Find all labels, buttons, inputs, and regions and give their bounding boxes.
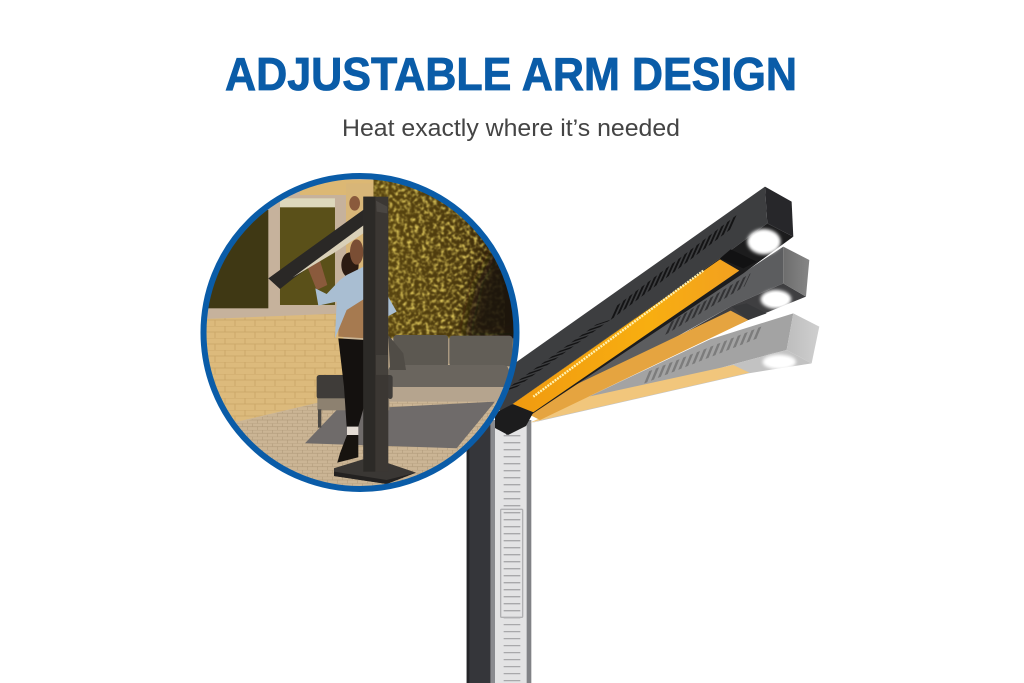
- faded heater vents: [647, 332, 761, 377]
- pole vent slots: [487, 435, 537, 683]
- foliage background: [372, 170, 525, 340]
- patio pavers: [236, 400, 496, 486]
- middle heater bottom face: [537, 283, 806, 417]
- middle heater end cap: [783, 247, 809, 297]
- middle heater lamp: [761, 290, 791, 309]
- top heater end cap: [765, 187, 793, 237]
- brick wall: [200, 313, 343, 422]
- woman: [307, 196, 397, 463]
- faded heater end cap: [787, 313, 819, 363]
- infographic canvas: [200, 57, 820, 683]
- pole top cap: [495, 413, 533, 435]
- ottoman: [317, 375, 393, 428]
- heater support pole: [467, 420, 531, 683]
- faded heater element: [530, 365, 749, 423]
- heater position 3: lowest, faded: [530, 313, 819, 423]
- heater position 1: top, solid black: [493, 187, 793, 435]
- rug: [305, 402, 495, 448]
- sofa: [388, 335, 513, 402]
- faded heater bottom face: [530, 350, 812, 423]
- house window: [208, 180, 374, 308]
- heater in photo: [268, 209, 364, 289]
- title: ADJUSTABLE ARM DESIGN: [225, 48, 797, 100]
- middle heater element: [527, 311, 748, 420]
- subtitle: Heat exactly where it’s needed: [342, 115, 680, 142]
- post and base in photo: [334, 197, 416, 484]
- top heater element: [513, 259, 739, 412]
- middle heater control panel: [732, 303, 767, 320]
- top heater lamp: [747, 229, 781, 254]
- pole inset bracket outline: [501, 509, 523, 617]
- top heater bright filament: [533, 271, 703, 397]
- top heater upper vents: [614, 222, 734, 313]
- heater position 2: middle, semi-faded: [527, 247, 809, 420]
- top heater control panel: [720, 249, 757, 268]
- photo inset blue ring: [204, 176, 516, 489]
- top heater bottom face: [495, 223, 793, 435]
- faded heater lamp: [763, 355, 796, 369]
- middle heater vents: [668, 280, 748, 328]
- photo inset: woman adjusting heater on patio: [206, 179, 514, 486]
- top heater lower vents: [510, 322, 603, 389]
